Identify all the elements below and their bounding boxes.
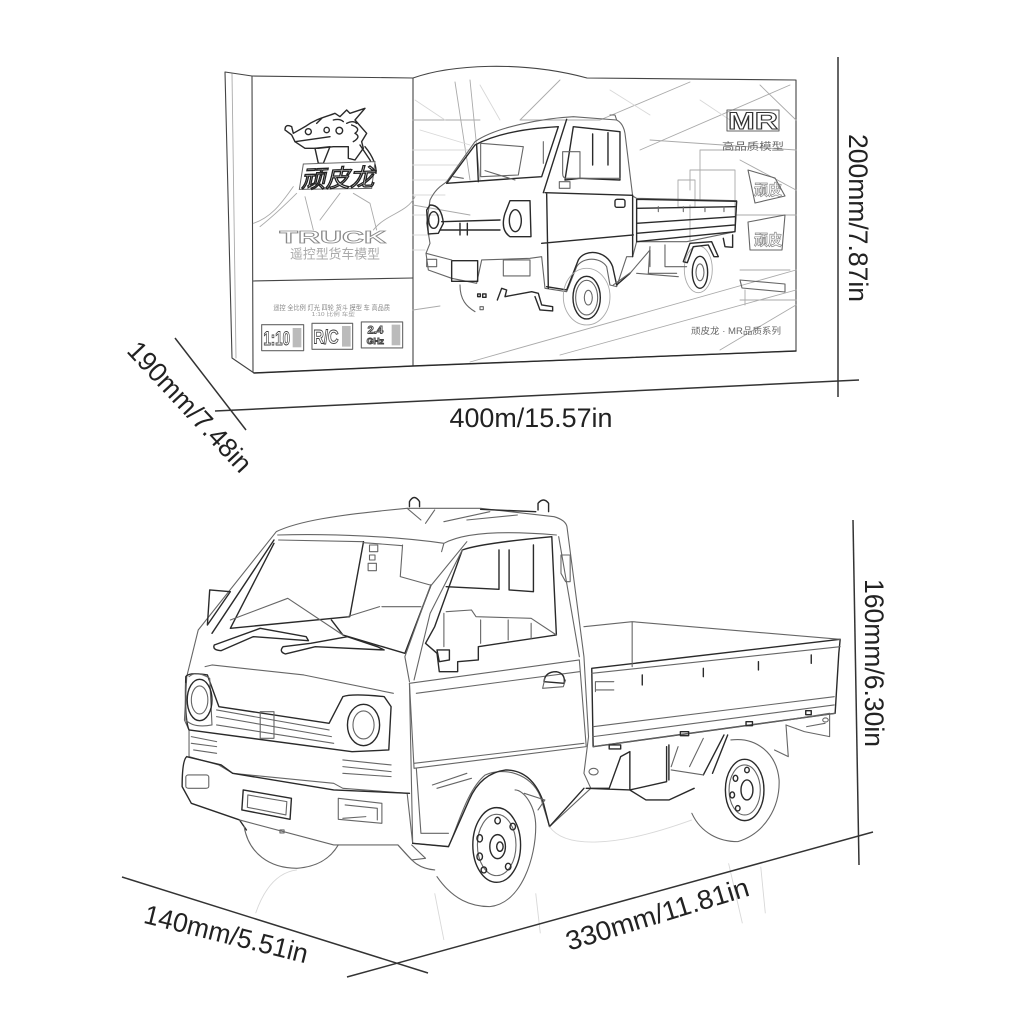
wheels: [547, 252, 630, 290]
truck bed: [584, 622, 840, 749]
front right wheel: [398, 790, 536, 907]
dimension: truck height: [853, 520, 889, 865]
dimension: box length: 400m/15.57in: [450, 403, 612, 433]
side logos on box: 顽皮: [754, 181, 782, 199]
dimension: box length: [215, 380, 859, 433]
box caption: 顽皮龙 · MR品质系列: [691, 325, 781, 336]
MR brand logo: 高品质模型: [722, 140, 784, 153]
MR brand logo: [722, 108, 784, 153]
truck illustration: [182, 497, 840, 940]
rear wheel: [692, 740, 779, 842]
TRUCK wordmark: TRUCK: [279, 227, 386, 247]
product box illustration: [225, 66, 796, 373]
front bumper: [182, 757, 426, 860]
headlights and grille: [185, 665, 393, 777]
badge: radio control: [312, 323, 353, 349]
dimension: box width: 190mm/7.48in: [121, 335, 258, 479]
box outline: [225, 66, 796, 373]
dragon logo: [285, 108, 378, 194]
left panel logo and badges: [253, 108, 415, 351]
dimension: truck width: 140mm/5.51in: [141, 899, 311, 969]
badge: 2.4 GHz: [361, 322, 403, 348]
box truck drawing: [426, 115, 737, 325]
badge: radio control: R/C: [313, 327, 339, 348]
windshield: [207, 540, 431, 653]
logo brand text: 顽皮龙: [300, 164, 378, 194]
side logos on box: [740, 170, 785, 292]
badge: scale: 1:10: [263, 329, 290, 350]
side logos on box: 顽皮: [754, 231, 782, 249]
chassis: [586, 713, 830, 800]
small description: 遥控 全比例 灯光 四轮 货斗 模型 车 高品质: [273, 303, 390, 312]
MR brand logo: MR: [728, 108, 778, 135]
front left wheel: [244, 827, 338, 868]
truck cab outline: [184, 497, 591, 847]
sketch strokes: [253, 187, 415, 230]
left panel logo and badges: 1:10 比例 车型: [312, 310, 356, 318]
badge: 2.4 GHz: GHz: [367, 336, 385, 346]
roof hooks: [409, 497, 549, 512]
dimension: truck length: [347, 832, 873, 977]
faint ground reflection: [256, 820, 765, 940]
garage background sketch: [413, 80, 796, 362]
wipers: [214, 628, 384, 654]
badge: 2.4 GHz: 2.4: [367, 324, 384, 336]
door and window: [405, 537, 598, 847]
dimension: truck height: 160mm/6.30in: [859, 579, 889, 747]
dimension: truck width: [122, 877, 428, 973]
dimension: truck length: 330mm/11.81in: [562, 872, 753, 957]
subtitle: 遥控型货车模型: [290, 246, 380, 262]
dimension: box height: 200mm/7.87in: [843, 134, 873, 302]
